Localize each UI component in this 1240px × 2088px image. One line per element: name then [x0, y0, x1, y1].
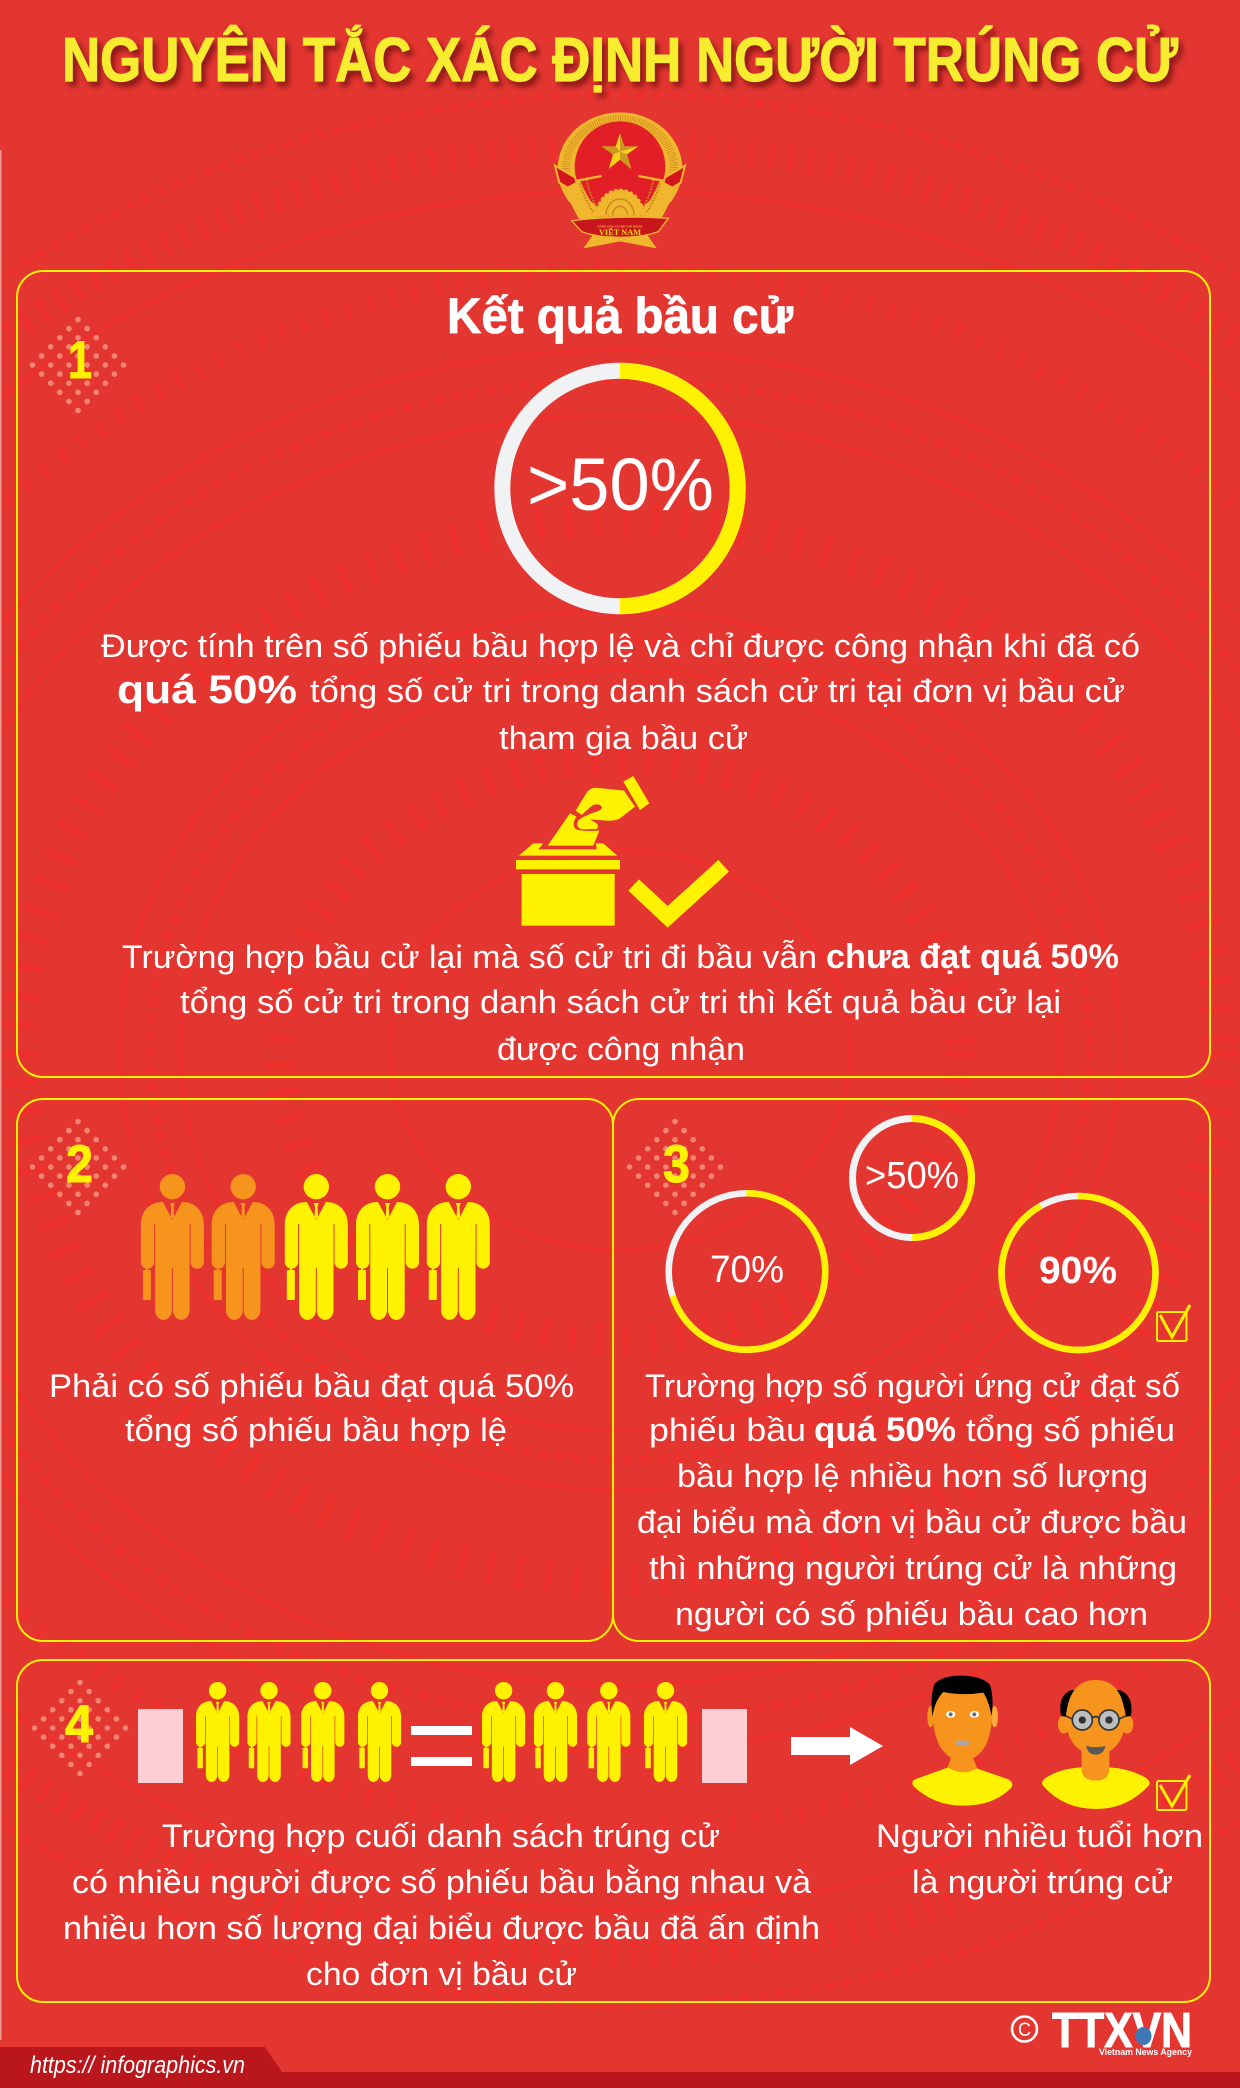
text block: rule over 50 percent: quá 50% — [117, 668, 297, 712]
big ring: over 50 percent — [502, 371, 738, 606]
footer bar with url: https:// infographics.vn — [30, 2052, 245, 2079]
number marker 2: 2 — [66, 1135, 93, 1194]
number marker 3: 3 — [663, 1135, 690, 1194]
number marker 4 — [32, 1680, 128, 1776]
icon row: four candidates right — [482, 1682, 687, 1782]
text block: tied votes case: cho đơn vị bầu cử — [306, 1956, 577, 1992]
text block: panel 3 rule: tổng số phiếu — [966, 1412, 1175, 1448]
ring: 90 percent — [1002, 1196, 1156, 1350]
number marker 4: 4 — [65, 1695, 93, 1754]
icon: national emblem of Vietnam: VIỆT NAM — [599, 228, 641, 237]
logo: TTXVN: Vietnam News Agency — [1099, 2047, 1192, 2057]
footer bar with url — [0, 2047, 1240, 2088]
text block: older person wins: Người nhiều tuổi hơn — [876, 1818, 1203, 1854]
panel: 1 election result — [17, 271, 1210, 1077]
ballot slip left — [138, 1709, 183, 1783]
text block: older person wins: là người trúng cử — [912, 1864, 1173, 1900]
text block: rule over 50 percent: tham gia bầu cử — [499, 720, 748, 756]
text block: tied votes case — [63, 1818, 820, 1992]
ring: 90 percent: 90% — [1039, 1250, 1117, 1292]
text block: tied votes case: nhiều hơn số lượng đại biểu được bầu đã ấn định — [63, 1910, 820, 1946]
text block: panel 2 rule — [49, 1368, 574, 1448]
icon: checkbox — [1157, 1305, 1190, 1341]
text block: re-election case: chưa đạt quá 50% — [826, 938, 1119, 976]
text block: rule over 50 percent — [101, 628, 1140, 756]
text block: re-election case: Trường hợp bầu cử lại mà số cử tri đi bầu vẫn — [122, 939, 817, 975]
text block: panel 3 rule: phiếu bầu — [649, 1412, 806, 1448]
number marker 1 — [30, 317, 126, 413]
text block: panel 2 rule: Phải có số phiếu bầu đạt quá 50% — [49, 1368, 574, 1404]
icon: older man with glasses — [1042, 1680, 1150, 1809]
panel: 2 votes over half — [17, 1099, 613, 1641]
ballot slip right — [702, 1709, 747, 1783]
text block: panel 3 rule: bầu hợp lệ nhiều hơn số lượng — [677, 1458, 1148, 1494]
logo: TTXVN: C — [1018, 2020, 1031, 2041]
text block: panel 3 rule: người có số phiếu bầu cao hơn — [675, 1596, 1148, 1632]
ring: over 50 percent small: >50% — [865, 1155, 959, 1197]
ring: 70 percent: 70% — [710, 1249, 784, 1291]
number marker 2 — [30, 1119, 126, 1215]
icon: checkbox — [1157, 1775, 1190, 1810]
text block: re-election case — [122, 938, 1119, 1067]
text block: re-election case: được công nhận — [497, 1031, 745, 1067]
text block: panel 3 rule: đại biểu mà đơn vị bầu cử được bầu — [637, 1504, 1187, 1540]
text block: rule over 50 percent: Được tính trên số phiếu bầu hợp lệ và chỉ được công nhận khi đã có — [101, 628, 1140, 664]
number marker 1: 1 — [68, 331, 92, 390]
ring: 70 percent — [669, 1193, 825, 1350]
ring: over 50 percent small — [852, 1118, 972, 1238]
icon row: five voters, two orange three yellow — [141, 1174, 490, 1320]
text block: panel 3 rule: quá 50% — [814, 1411, 956, 1449]
big ring: over 50 percent: >50% — [527, 443, 714, 526]
panel: 4 tied votes — [17, 1660, 1210, 2002]
text block: re-election case: tổng số cử tri trong danh sách cử tri thì kết quả bầu cử lại — [180, 984, 1061, 1020]
panel: 3 candidates exceed seats — [613, 1099, 1210, 1641]
heading: election result: Kết quả bầu cử — [447, 288, 794, 344]
icon row: four candidates left — [196, 1682, 401, 1782]
text block: panel 3 rule — [637, 1368, 1187, 1632]
text block: panel 3 rule: thì những người trúng cử là những — [649, 1550, 1177, 1586]
arrow — [791, 1727, 883, 1765]
icon: national emblem of Vietnam — [555, 112, 685, 248]
icon: ballot box with check — [516, 776, 729, 928]
number marker 3 — [627, 1119, 723, 1215]
equals sign — [411, 1726, 472, 1766]
text block: rule over 50 percent: tổng số cử tri trong danh sách cử tri tại đơn vị bầu cử — [310, 673, 1125, 709]
icon: national emblem of Vietnam: CỘNG HÒA XÃ HỘI CHỦ NGHĨA — [597, 223, 643, 228]
text block: older person wins — [876, 1818, 1203, 1900]
text block: tied votes case: Trường hợp cuối danh sách trúng cử — [162, 1818, 720, 1854]
logo: TTXVN: TTXVN — [1052, 2004, 1192, 2058]
text block: panel 2 rule: tổng số phiếu bầu hợp lệ — [125, 1412, 507, 1448]
logo: TTXVN — [1012, 2004, 1192, 2058]
text block: panel 3 rule: Trường hợp số người ứng cử đạt số — [645, 1368, 1180, 1404]
text block: tied votes case: có nhiều người được số phiếu bầu bằng nhau và — [72, 1864, 811, 1900]
icon: younger man — [912, 1676, 1012, 1806]
